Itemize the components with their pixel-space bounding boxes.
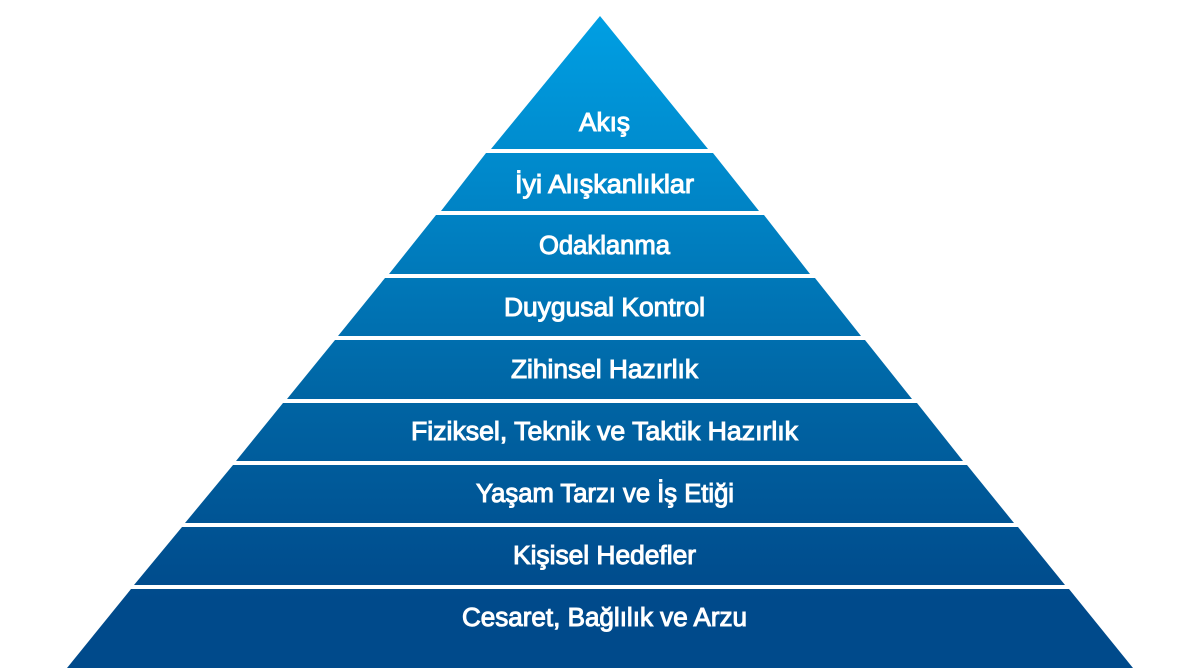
pyramid layer 4: Duygusal Kontrol: Duygusal Kontrol bbox=[504, 294, 705, 322]
pyramid layer 8: Kişisel Hedefler: Kişisel Hedefler bbox=[513, 542, 697, 570]
pyramid layer 1: Akış: Akış bbox=[579, 109, 630, 137]
pyramid layer 3: Odaklanma bbox=[389, 215, 810, 274]
pyramid layer 7: Yaşam Tarzı ve İş Etiği: Yaşam Tarzı ve İş Etiği bbox=[476, 479, 734, 508]
pyramid layer 6: Fiziksel, Teknik ve Taktik Hazırlık bbox=[236, 403, 963, 461]
pyramid layer 9: Cesaret, Bağlılık ve Arzu bbox=[67, 589, 1133, 668]
pyramid layer 6: Fiziksel, Teknik ve Taktik Hazırlık: Fiziksel, Teknik ve Taktik Hazırlık bbox=[411, 418, 798, 446]
pyramid layer 4: Duygusal Kontrol bbox=[338, 278, 861, 336]
pyramid layer 5: Zihinsel Hazırlık: Zihinsel Hazırlık bbox=[511, 356, 698, 384]
pyramid layer 9: Cesaret, Bağlılık ve Arzu: Cesaret, Bağlılık ve Arzu bbox=[462, 604, 747, 632]
pyramid layer 5: Zihinsel Hazırlık bbox=[287, 340, 912, 399]
pyramid layer 2: İyi Alışkanlıklar bbox=[441, 153, 759, 211]
pyramid layer 7: Yaşam Tarzı ve İş Etiği bbox=[185, 465, 1014, 523]
pyramid layer 1: Akış bbox=[491, 16, 708, 149]
pyramid layer 3: Odaklanma: Odaklanma bbox=[539, 232, 671, 260]
pyramid layer 8: Kişisel Hedefler bbox=[134, 527, 1065, 585]
pyramid layer 2: İyi Alışkanlıklar: İyi Alışkanlıklar bbox=[515, 170, 695, 199]
